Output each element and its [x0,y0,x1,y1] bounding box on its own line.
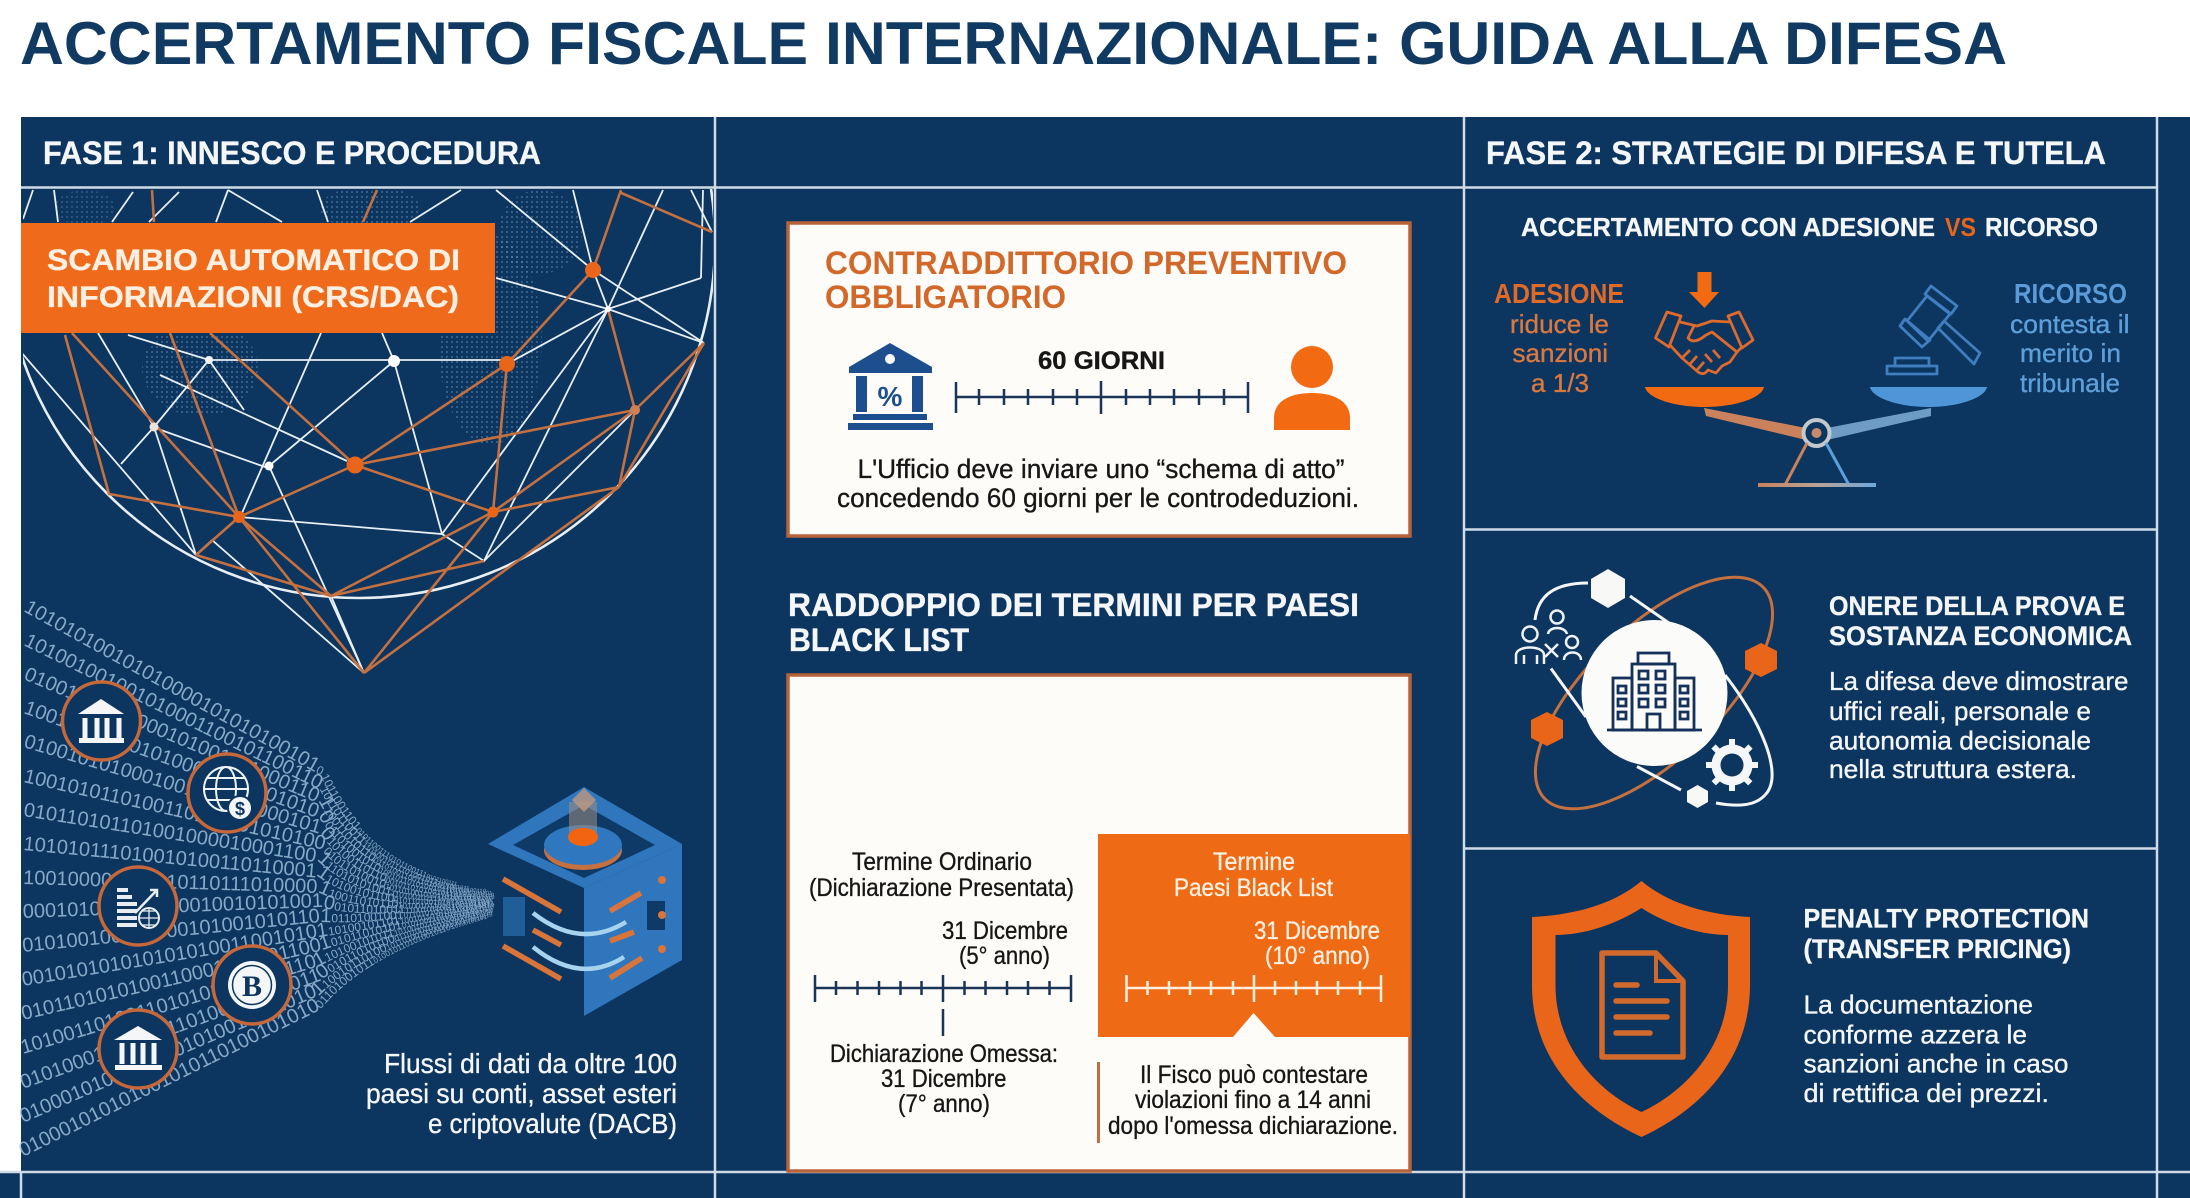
binary data stream: 101010111010010100110110001110100101100010110100101011010010101101001 [24,836,491,905]
card text: concedendo 60 giorni per le controdeduzioni. [837,483,1359,513]
termine black list: Termine [1213,848,1295,876]
binary data stream: 10100100100101000110010110011010110110011110100101111010010111101001011 [24,634,469,890]
icon: people [1516,610,1581,664]
globe network [23,189,713,674]
binary data stream: 010100100101000101001010110101101001001011010100101101010010110101001 [23,902,494,952]
termine black list: (10° anno) [1265,942,1370,970]
nota fisco: violazioni fino a 14 anni [1135,1086,1371,1114]
heading: raddoppio dei termini: BLACK LIST [789,622,969,658]
binary data stream: 001010101010101010011001010110100101101100101101010010110101001011010 [22,904,494,986]
icon: gear [1706,739,1758,791]
termine ordinario: Termine Ordinario [852,848,1032,876]
icon: bitcoin [213,946,291,1024]
termine ordinario: Dichiarazione Omessa: [830,1040,1058,1068]
card: contraddittorio preventivo [788,223,1410,536]
nota fisco: Il Fisco può contestare [1140,1061,1368,1089]
adesione text: ADESIONE [1494,278,1624,309]
icon: building chart and globe [99,867,177,945]
text: flussi di dati: Flussi di dati da oltre 100 [384,1048,677,1079]
heading: raddoppio dei termini: RADDOPPIO DEI TERMINI PER PAESI [788,587,1359,623]
text: onere: SOSTANZA ECONOMICA [1829,621,2132,651]
heading: fase 1: FASE 1: INNESCO E PROCEDURA [43,135,541,171]
icon: down arrow [1689,272,1719,308]
icon: taxpayer [1274,346,1350,430]
card text [837,454,1359,513]
text: flussi di dati: paesi su conti, asset esteri [366,1078,677,1109]
icon: bitcoin: B [242,970,262,1003]
subheading: VS [1945,212,1976,242]
termine ordinario: (Dichiarazione Presentata) [809,874,1074,902]
text: penalty protection: (TRANSFER PRICING) [1804,934,2071,964]
binary data stream: 1001010001010100000101001010001101001010100101101010010110101001011010 [24,702,492,895]
callout: scambio automatico: SCAMBIO AUTOMATICO DI [47,244,460,277]
binary data stream: 0101101010100110001010001100101011010101010100110101010011010101001101 [22,906,492,1020]
icon: balance scale [1645,387,1987,487]
callout: scambio automatico: INFORMAZIONI (CRS/DAC) [47,281,459,314]
adesione text: a 1/3 [1531,368,1589,398]
icon: tax office [848,343,933,430]
text: penalty protection: sanzioni anche in caso [1804,1048,2068,1078]
text: onere [1829,591,2132,784]
section: adesione vs ricorso [1494,212,2130,487]
binary data stream [19,602,494,1156]
card: raddoppio dei termini [788,675,1410,1171]
ricorso text: contesta il [2010,309,2130,339]
60 day timeline [956,347,1248,414]
heading: raddoppio dei termini [788,587,1359,658]
termine ordinario: (7° anno) [898,1090,990,1118]
termine ordinario [809,848,1074,1118]
ricorso text: RICORSO [2014,278,2127,309]
icon: bank [62,682,140,760]
termine black list: 31 Dicembre [1254,917,1380,945]
callout: scambio automatico [21,223,495,333]
binary data stream: 010110101101001000010001100111010101001110100101111010010111101001011 [24,803,492,902]
section: penalty protection [1532,881,2089,1137]
icon: handshake [1656,312,1753,374]
termine ordinario: 31 Dicembre [881,1065,1006,1093]
binary data stream: 000101010101000010010101001001011010011110010110111001011011100101101 [24,893,494,918]
title: ACCERTAMENTO FISCALE INTERNAZIONALE: GUIDA ALLA DIFESA [20,10,2007,77]
card heading: CONTRADDITTORIO PREVENTIVO [825,245,1347,281]
adesione text: sanzioni [1512,338,1608,368]
ricorso text: merito in [2020,338,2121,368]
binary data stream: 01001001101000101001101000110110011010110011010011001101001100110100110 [25,668,486,893]
icon: shield with document [1532,881,1750,1137]
adesione text [1494,278,1624,398]
icon: globe with dollar: $ [235,799,245,819]
card text: L'Ufficio deve inviare uno “schema di atto” [858,454,1344,484]
binary data stream: 01000101010100101011010010101001101001011010010110101001011010100101101 [19,915,487,1156]
icon: economic substance orbit [1499,540,1809,846]
hexagons [1591,569,1625,608]
termine ordinario: 31 Dicembre [942,917,1068,945]
heading: fase 2: FASE 2: STRATEGIE DI DIFESA E TUTELA [1486,135,2106,171]
text: onere: uffici reali, personale e [1829,696,2091,726]
panel: fase 2 [1486,135,2132,1137]
icon: tax office: % [878,381,903,412]
subheading: RICORSO [1985,212,2098,242]
text: penalty protection: di rettifica dei prezzi. [1804,1078,2049,1108]
text: onere: ONERE DELLA PROVA E [1829,591,2125,621]
text: flussi di dati [366,1048,677,1139]
60 day timeline: 60 GIORNI [1038,347,1165,375]
nota fisco: dopo l'omessa dichiarazione. [1108,1112,1398,1140]
card heading: OBBLIGATORIO [825,279,1066,315]
icon: bank 2 [99,1010,177,1088]
binary data stream: 1010011010011010101001000110110100101011101001011010100101101010010110 [22,908,493,1054]
binary data stream: 100100001010110110111010000110011010110101001011010100101101010010110 [24,870,492,909]
icon: globe with dollar [188,754,266,832]
text: penalty protection: La documentazione [1804,990,2033,1020]
termine ordinario: (5° anno) [959,942,1050,970]
text: penalty protection [1804,904,2089,1108]
panel: centrale [788,223,1410,1171]
termine black list: Paesi Black List [1174,874,1333,902]
binary data stream: 01000101010010101010010011010110010110100101101001010110100101011010010 [20,912,492,1122]
section: onere della prova [1499,540,2132,846]
subheading: ACCERTAMENTO CON ADESIONE [1521,212,1935,242]
icon: data server cube [488,787,682,1016]
icon: building [1607,653,1702,730]
text: onere: La difesa deve dimostrare [1829,666,2128,696]
text: flussi di dati: e criptovalute (DACB) [428,1108,677,1139]
panel: fase 1 [19,135,713,1156]
binary data stream: 100101011010011010100101010001011010010101101001010110100101011010010 [24,770,494,900]
text: penalty protection: PENALTY PROTECTION [1804,904,2089,934]
ricorso text [2010,278,2130,398]
icon: gavel [1887,286,1980,374]
text: onere: nella struttura estera. [1829,754,2077,784]
card heading [825,245,1347,315]
binary data stream: 0100101010001001100011000101010100110110001011010100101101010010110101 [25,735,494,898]
adesione text: riduce le [1510,309,1609,339]
text: penalty protection: conforme azzera le [1804,1020,2027,1050]
ricorso text: tribunale [2020,368,2120,398]
termine black list [1098,834,1410,1037]
nota fisco [1097,1061,1398,1143]
binary data stream: 01010001010010110100010110011001011010100011010010101101001010110100101 [20,910,492,1088]
binary data stream: 10101010010101000010101010010101011001101010110011101011001110101100111 [24,602,457,886]
text: onere: autonomia decisionale [1829,726,2091,756]
